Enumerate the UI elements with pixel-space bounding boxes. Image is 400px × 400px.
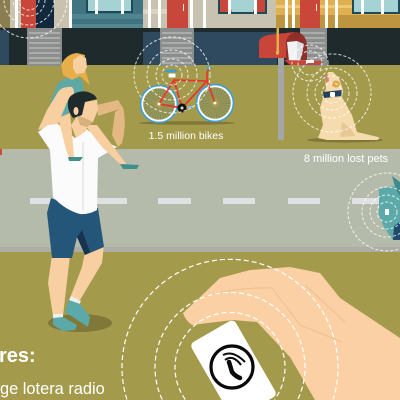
- father shorts: [47, 198, 104, 258]
- bicycle: [139, 66, 235, 125]
- spokes: [148, 92, 226, 115]
- hand: [183, 267, 400, 400]
- child legs and shoes: [58, 113, 74, 157]
- signal rings: bicycle tag: [134, 37, 210, 113]
- father shoes: [53, 317, 77, 331]
- features heading: res:: [0, 345, 36, 367]
- child arm: [97, 100, 123, 116]
- signal rings: hand tag: [122, 259, 338, 400]
- child face: [73, 55, 87, 74]
- signal rings: top-left door tag: [0, 0, 67, 38]
- child body: [50, 75, 84, 120]
- wheels: [141, 85, 233, 122]
- teal object at right edge: [379, 176, 400, 240]
- road: [0, 149, 400, 252]
- pets label: 8 million lost pets: [304, 153, 389, 165]
- building row: [0, 0, 400, 66]
- father arm right: [112, 107, 125, 147]
- dog: [307, 72, 383, 142]
- father ear: [74, 107, 78, 115]
- hand holding tracker tag: [183, 267, 400, 400]
- lane markings: [30, 198, 385, 204]
- father neck and face: [71, 100, 98, 138]
- father shirt: [38, 124, 117, 214]
- father carrying child: [38, 53, 139, 332]
- features list item: ge lotera radio: [0, 380, 105, 398]
- signal rings: dog collar: [293, 54, 371, 132]
- tag logo: [211, 346, 253, 388]
- father legs: [48, 255, 70, 316]
- mailbox: [259, 28, 322, 140]
- signal rings: teal object: [348, 173, 400, 251]
- bikes label: 1.5 million bikes: [149, 130, 223, 142]
- tracker tag: [191, 321, 276, 400]
- father arm raised: [38, 87, 74, 130]
- ground shadow: [48, 314, 112, 332]
- stairs: [27, 28, 327, 66]
- signal rings: mailbox tag: [292, 45, 328, 81]
- father hair: [68, 91, 97, 118]
- child hair: [61, 53, 90, 85]
